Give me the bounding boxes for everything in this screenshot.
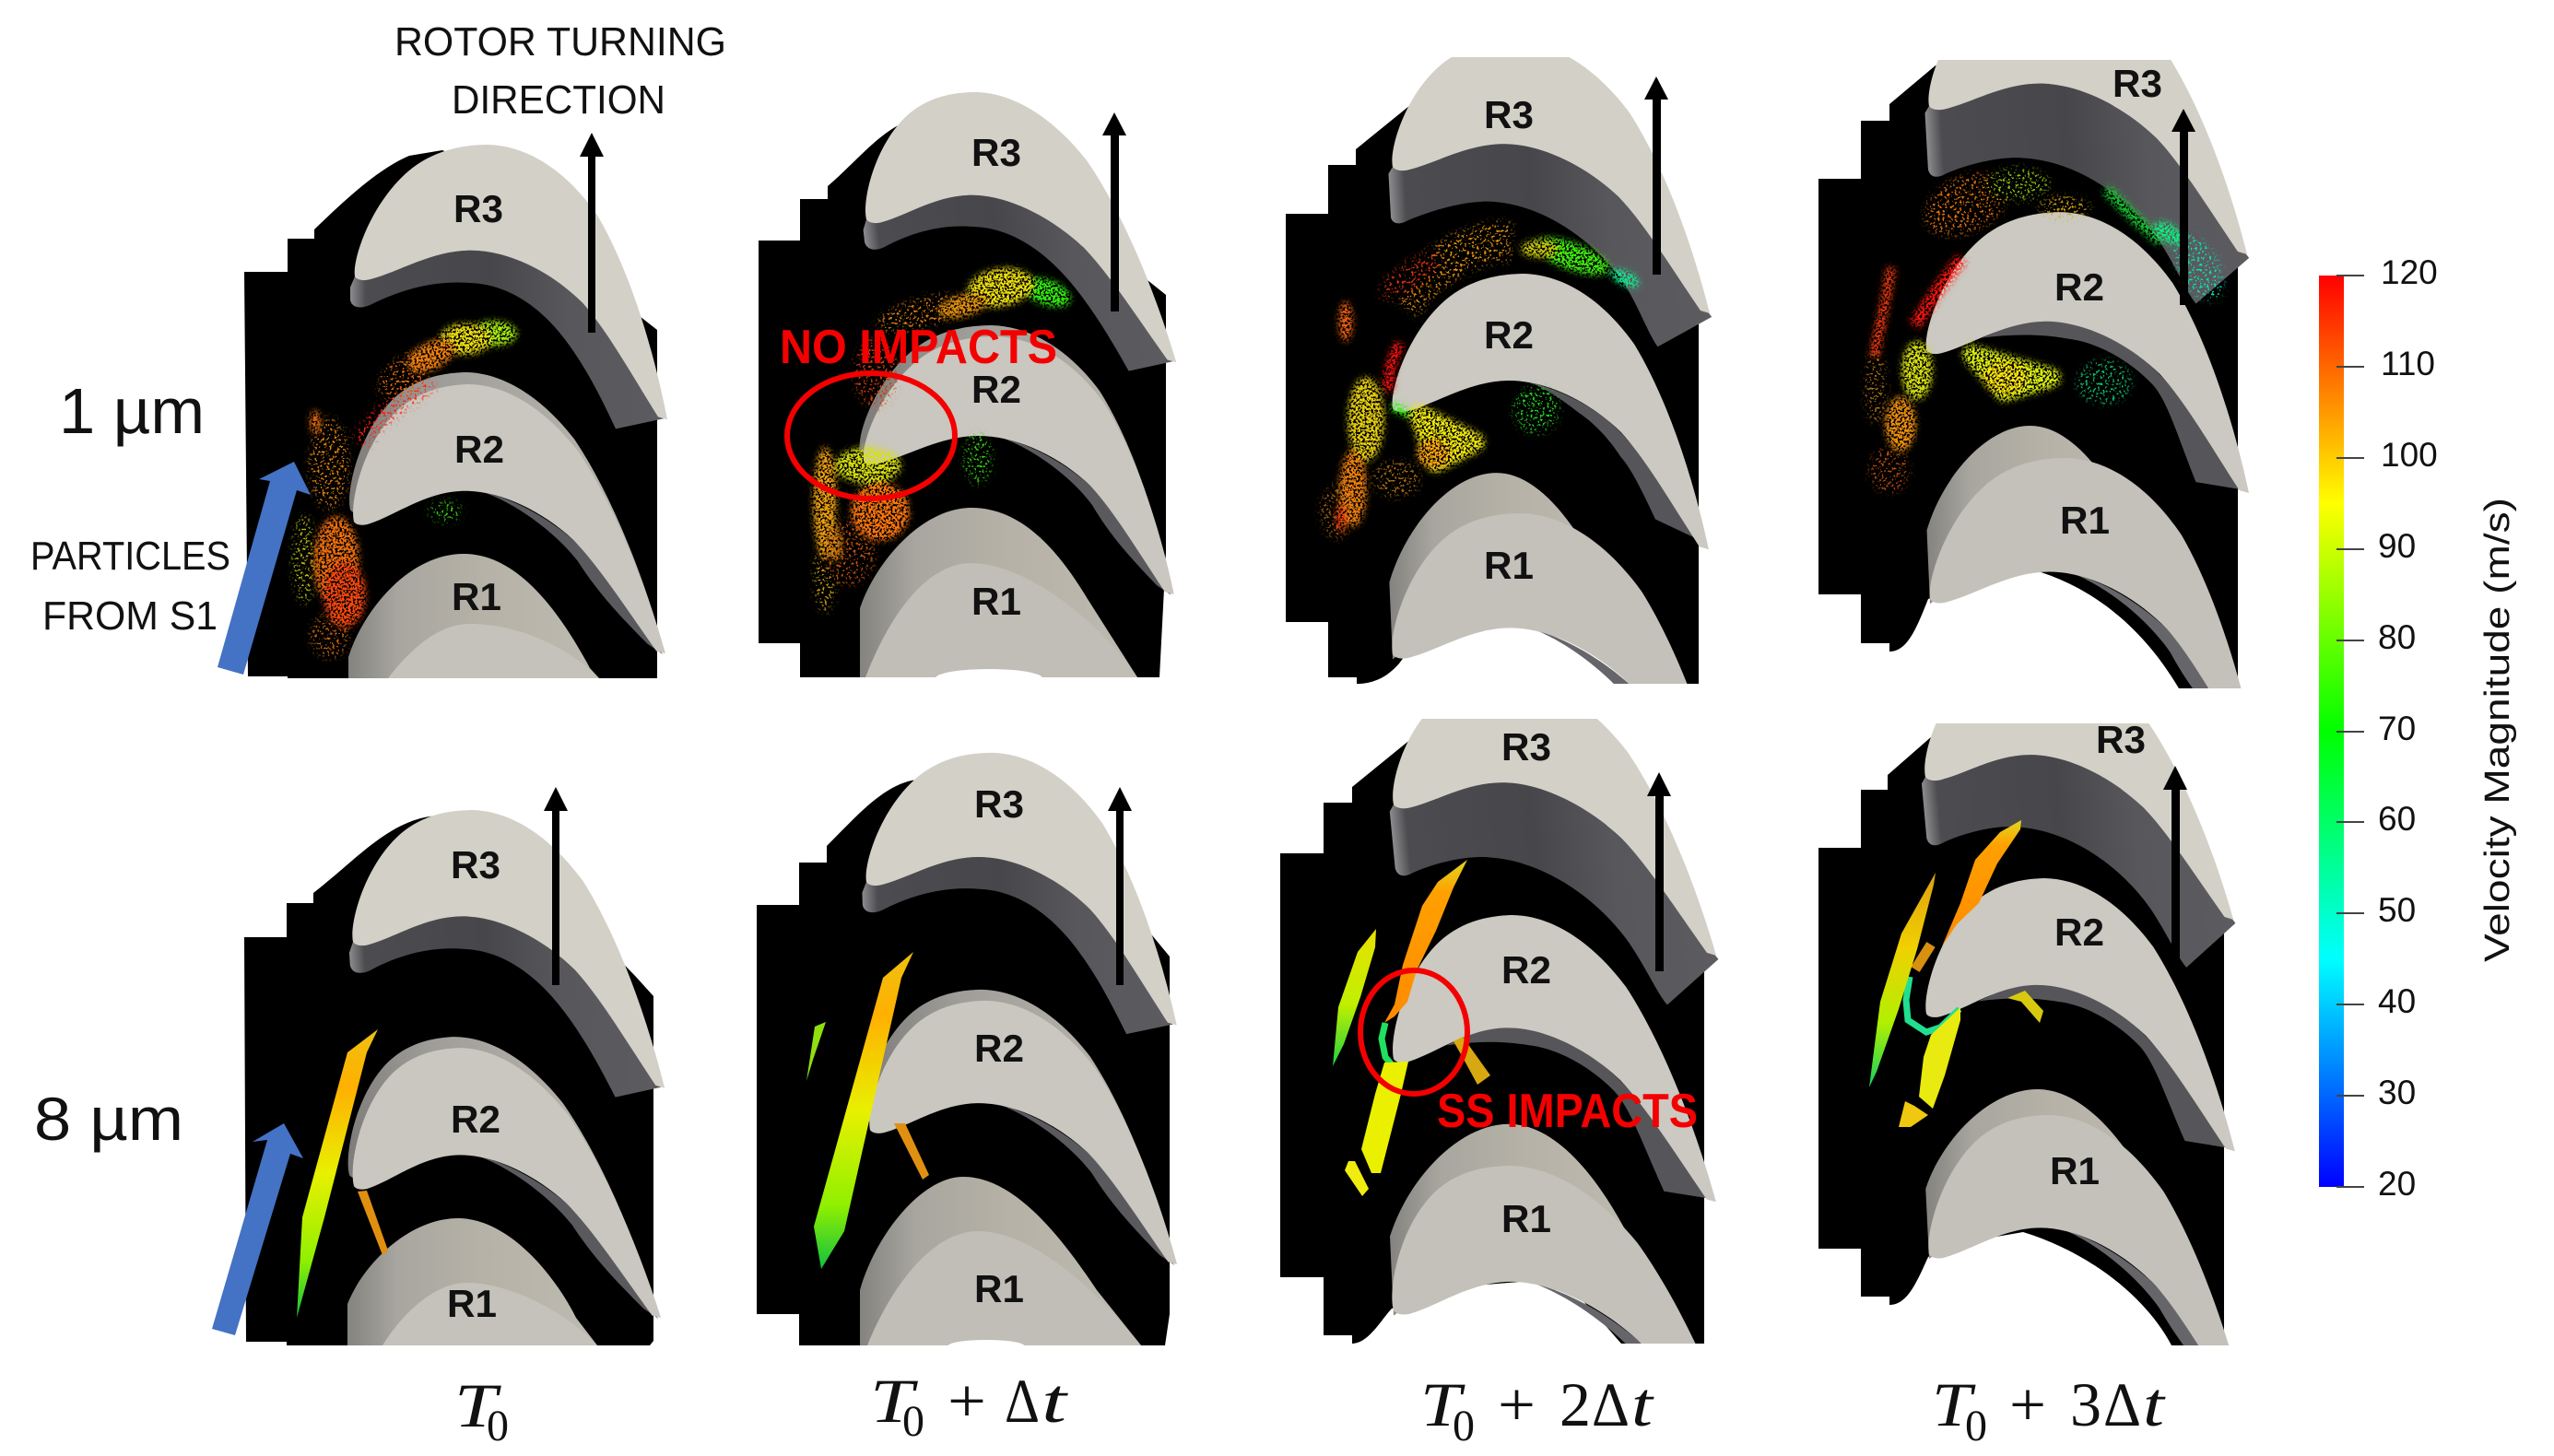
- callout circle: no impacts: [787, 373, 955, 499]
- particle streak: left: [1869, 873, 1936, 1087]
- blades R3, R2, R1: [1390, 719, 1718, 1344]
- tick labels: 20: [2378, 1165, 2416, 1203]
- label R3: R3: [1501, 725, 1551, 769]
- blade R3: [344, 810, 665, 1098]
- panel: 8 µm at T0 + Δt: [757, 753, 1177, 1353]
- blade R1: [860, 1177, 1141, 1353]
- time label: T0 + 2Δt: t: [1631, 1369, 1655, 1439]
- panel: 1 µm at T0 + 3Δt: [1818, 0, 2256, 757]
- time label: T0 + 3Δt: 3: [2070, 1369, 2101, 1439]
- label R3: R3: [1484, 93, 1534, 136]
- blades R3, R2, R1: [1383, 40, 1729, 816]
- blade R3: [350, 144, 667, 430]
- tick labels: 70: [2378, 710, 2416, 747]
- label R1: R1: [1501, 1197, 1551, 1240]
- label R3: R3: [451, 843, 500, 887]
- tick labels: 40: [2378, 982, 2416, 1020]
- label R2: R2: [454, 428, 504, 471]
- particle streak: pressure side: [894, 1123, 929, 1180]
- particle cloud: dense: [310, 321, 517, 628]
- label R1: R1: [447, 1282, 497, 1325]
- blade R3: [852, 91, 1176, 371]
- passage background: [244, 816, 653, 1345]
- blade R1: [347, 1218, 597, 1345]
- arrow: rotor turning: [580, 133, 604, 333]
- tick labels: 100: [2381, 436, 2438, 474]
- label: particles from S1: FROM S1: [42, 593, 218, 639]
- tick labels: 110: [2381, 345, 2435, 382]
- time label: T0: 0: [487, 1402, 509, 1450]
- label R3: R3: [453, 187, 503, 230]
- tick labels: 60: [2378, 800, 2416, 838]
- blade R2: [336, 364, 665, 667]
- label R1: R1: [2060, 499, 2110, 542]
- label R2: R2: [2054, 910, 2104, 954]
- time label: T0 + Δt: 0: [902, 1397, 924, 1446]
- passage background: [1286, 98, 1699, 684]
- passage background: [1280, 734, 1704, 1344]
- panel: 1 µm at T0: [244, 133, 667, 678]
- label R2: R2: [1484, 313, 1534, 357]
- blades R3, R2, R1: [1922, 723, 2236, 1345]
- particle streak: [814, 952, 913, 1269]
- label R3: R3: [974, 782, 1024, 826]
- blade R2: [855, 986, 1177, 1270]
- particle streak: main: [1345, 860, 1467, 1196]
- time label: T0 + 3Δt: +: [2009, 1369, 2046, 1439]
- panel: 8 µm at T0 + 2Δt: [1280, 719, 1718, 1344]
- time label: T0 + Δt: [870, 1366, 1069, 1446]
- callout: SS impacts: SS IMPACTS: [1437, 1085, 1698, 1138]
- label R2: R2: [974, 1027, 1024, 1070]
- label: particles from S1: [30, 534, 230, 639]
- colour ramp: [2319, 276, 2344, 1187]
- blades R3, R2, R1: [1924, 60, 2249, 688]
- colour bar legend: [2319, 253, 2517, 1203]
- label R1: R1: [971, 580, 1021, 623]
- passage background: [1818, 736, 2224, 1345]
- panel: 1 µm at T0 + Δt: [759, 91, 1176, 687]
- label: particles from S1: PARTICLES: [30, 534, 230, 579]
- time label: T0: T: [454, 1370, 501, 1440]
- time label: T0 + 2Δt: 2: [1559, 1369, 1591, 1439]
- particle streak: pressure side: [2007, 991, 2043, 1023]
- time label: T0 + Δt: T: [870, 1366, 918, 1436]
- arrow: particle inflow (8 µm): [212, 1123, 303, 1335]
- blade R2: [331, 1028, 661, 1333]
- callout circle: SS impacts: [1360, 970, 1467, 1094]
- blade R3: [861, 753, 1177, 1034]
- label R2: R2: [451, 1098, 500, 1141]
- panel: 8 µm at T0: [244, 787, 665, 1345]
- tick labels: 30: [2378, 1074, 2416, 1111]
- time label: T0 + 2Δt: 0: [1453, 1402, 1475, 1450]
- time label: T0 + 2Δt: [1420, 1369, 1655, 1450]
- passage background: [757, 780, 1170, 1345]
- time label: T0 + 2Δt: T: [1420, 1369, 1465, 1439]
- time label: T0 + 3Δt: [1932, 1369, 2167, 1450]
- heading: rotor turning direction: DIRECTION: [452, 77, 665, 123]
- axis title: Velocity Magnitude (m/s): [2478, 498, 2517, 962]
- time label: T0 + Δt: t: [1042, 1366, 1069, 1436]
- heading: rotor turning direction: ROTOR TURNING: [394, 19, 726, 65]
- particle cloud: dense: [1336, 229, 1642, 533]
- particle cloud: dense: [1874, 189, 2187, 452]
- time label: T0 + 3Δt: Δ: [2103, 1369, 2141, 1439]
- label R3: R3: [2096, 718, 2146, 761]
- arrow: rotor turning: [1102, 112, 1126, 311]
- particle cloud: sparse trail: [1320, 241, 1559, 539]
- row label: 8 µm: 8 µm: [34, 1085, 183, 1153]
- label R2: R2: [2054, 265, 2104, 309]
- arrow: rotor turning: [2171, 109, 2195, 305]
- time label: T0 + Δt: Δ: [1005, 1366, 1040, 1436]
- heading: rotor turning direction: [394, 19, 726, 123]
- arrow: rotor turning: [1644, 76, 1668, 275]
- particle cloud: sparse trail: [814, 288, 993, 613]
- label R1: R1: [974, 1267, 1024, 1310]
- arrow: rotor turning: [544, 787, 568, 985]
- arrow: rotor turning: [1108, 787, 1132, 985]
- row label: 1 µm: 1 µm: [59, 375, 205, 447]
- passage background: [759, 119, 1166, 677]
- time label: T0 + 3Δt: T: [1932, 1369, 1976, 1439]
- arrow: rotor turning: [1647, 772, 1671, 971]
- particle streak: [297, 1029, 378, 1318]
- time label: T0 + 3Δt: t: [2143, 1369, 2167, 1439]
- tick labels: 120: [2381, 253, 2438, 291]
- arrow: particle inflow (1 µm): [218, 462, 311, 675]
- particle cloud: sparse trail: [292, 341, 462, 659]
- passage background: [1818, 65, 2238, 688]
- panel: 8 µm at T0 + 3Δt: [1818, 653, 2247, 1412]
- tick labels: 80: [2378, 618, 2416, 656]
- label R3: R3: [971, 131, 1021, 174]
- tick labels: 50: [2378, 891, 2416, 929]
- label R2: R2: [1501, 948, 1551, 992]
- blade R1: [860, 508, 1137, 687]
- particle streak: left: [806, 1022, 826, 1081]
- particle cloud: sparse trail: [1865, 161, 2234, 493]
- time label: T0 + 2Δt: Δ: [1592, 1369, 1630, 1439]
- time label: T0 + Δt: +: [947, 1366, 986, 1436]
- label R2: R2: [971, 368, 1021, 411]
- label R1: R1: [452, 575, 501, 618]
- particle streak: main: [1899, 820, 2021, 1127]
- panel: 1 µm at T0 + 2Δt: [1286, 40, 1729, 816]
- particle streak: pressure side: [1454, 1037, 1490, 1085]
- label R3: R3: [2113, 62, 2162, 105]
- time label: T0 + 3Δt: 0: [1965, 1402, 1987, 1450]
- tick marks: [2336, 276, 2364, 1187]
- particle streak: pressure side: [358, 1191, 388, 1255]
- blade R1: [348, 554, 599, 678]
- tick labels: [2378, 253, 2438, 1203]
- callout: no impacts: NO IMPACTS: [780, 321, 1057, 374]
- particle cloud: dense: [813, 263, 1075, 562]
- time label: T0: [454, 1370, 509, 1450]
- time label: T0 + 2Δt: +: [1498, 1369, 1536, 1439]
- passage background: [244, 150, 657, 678]
- tick labels: 90: [2378, 527, 2416, 565]
- particle streak: left: [1333, 929, 1376, 1066]
- arrow: rotor turning: [2163, 766, 2187, 963]
- label R1: R1: [1484, 544, 1534, 587]
- blade R2: [859, 323, 1174, 597]
- label R1: R1: [2050, 1149, 2100, 1192]
